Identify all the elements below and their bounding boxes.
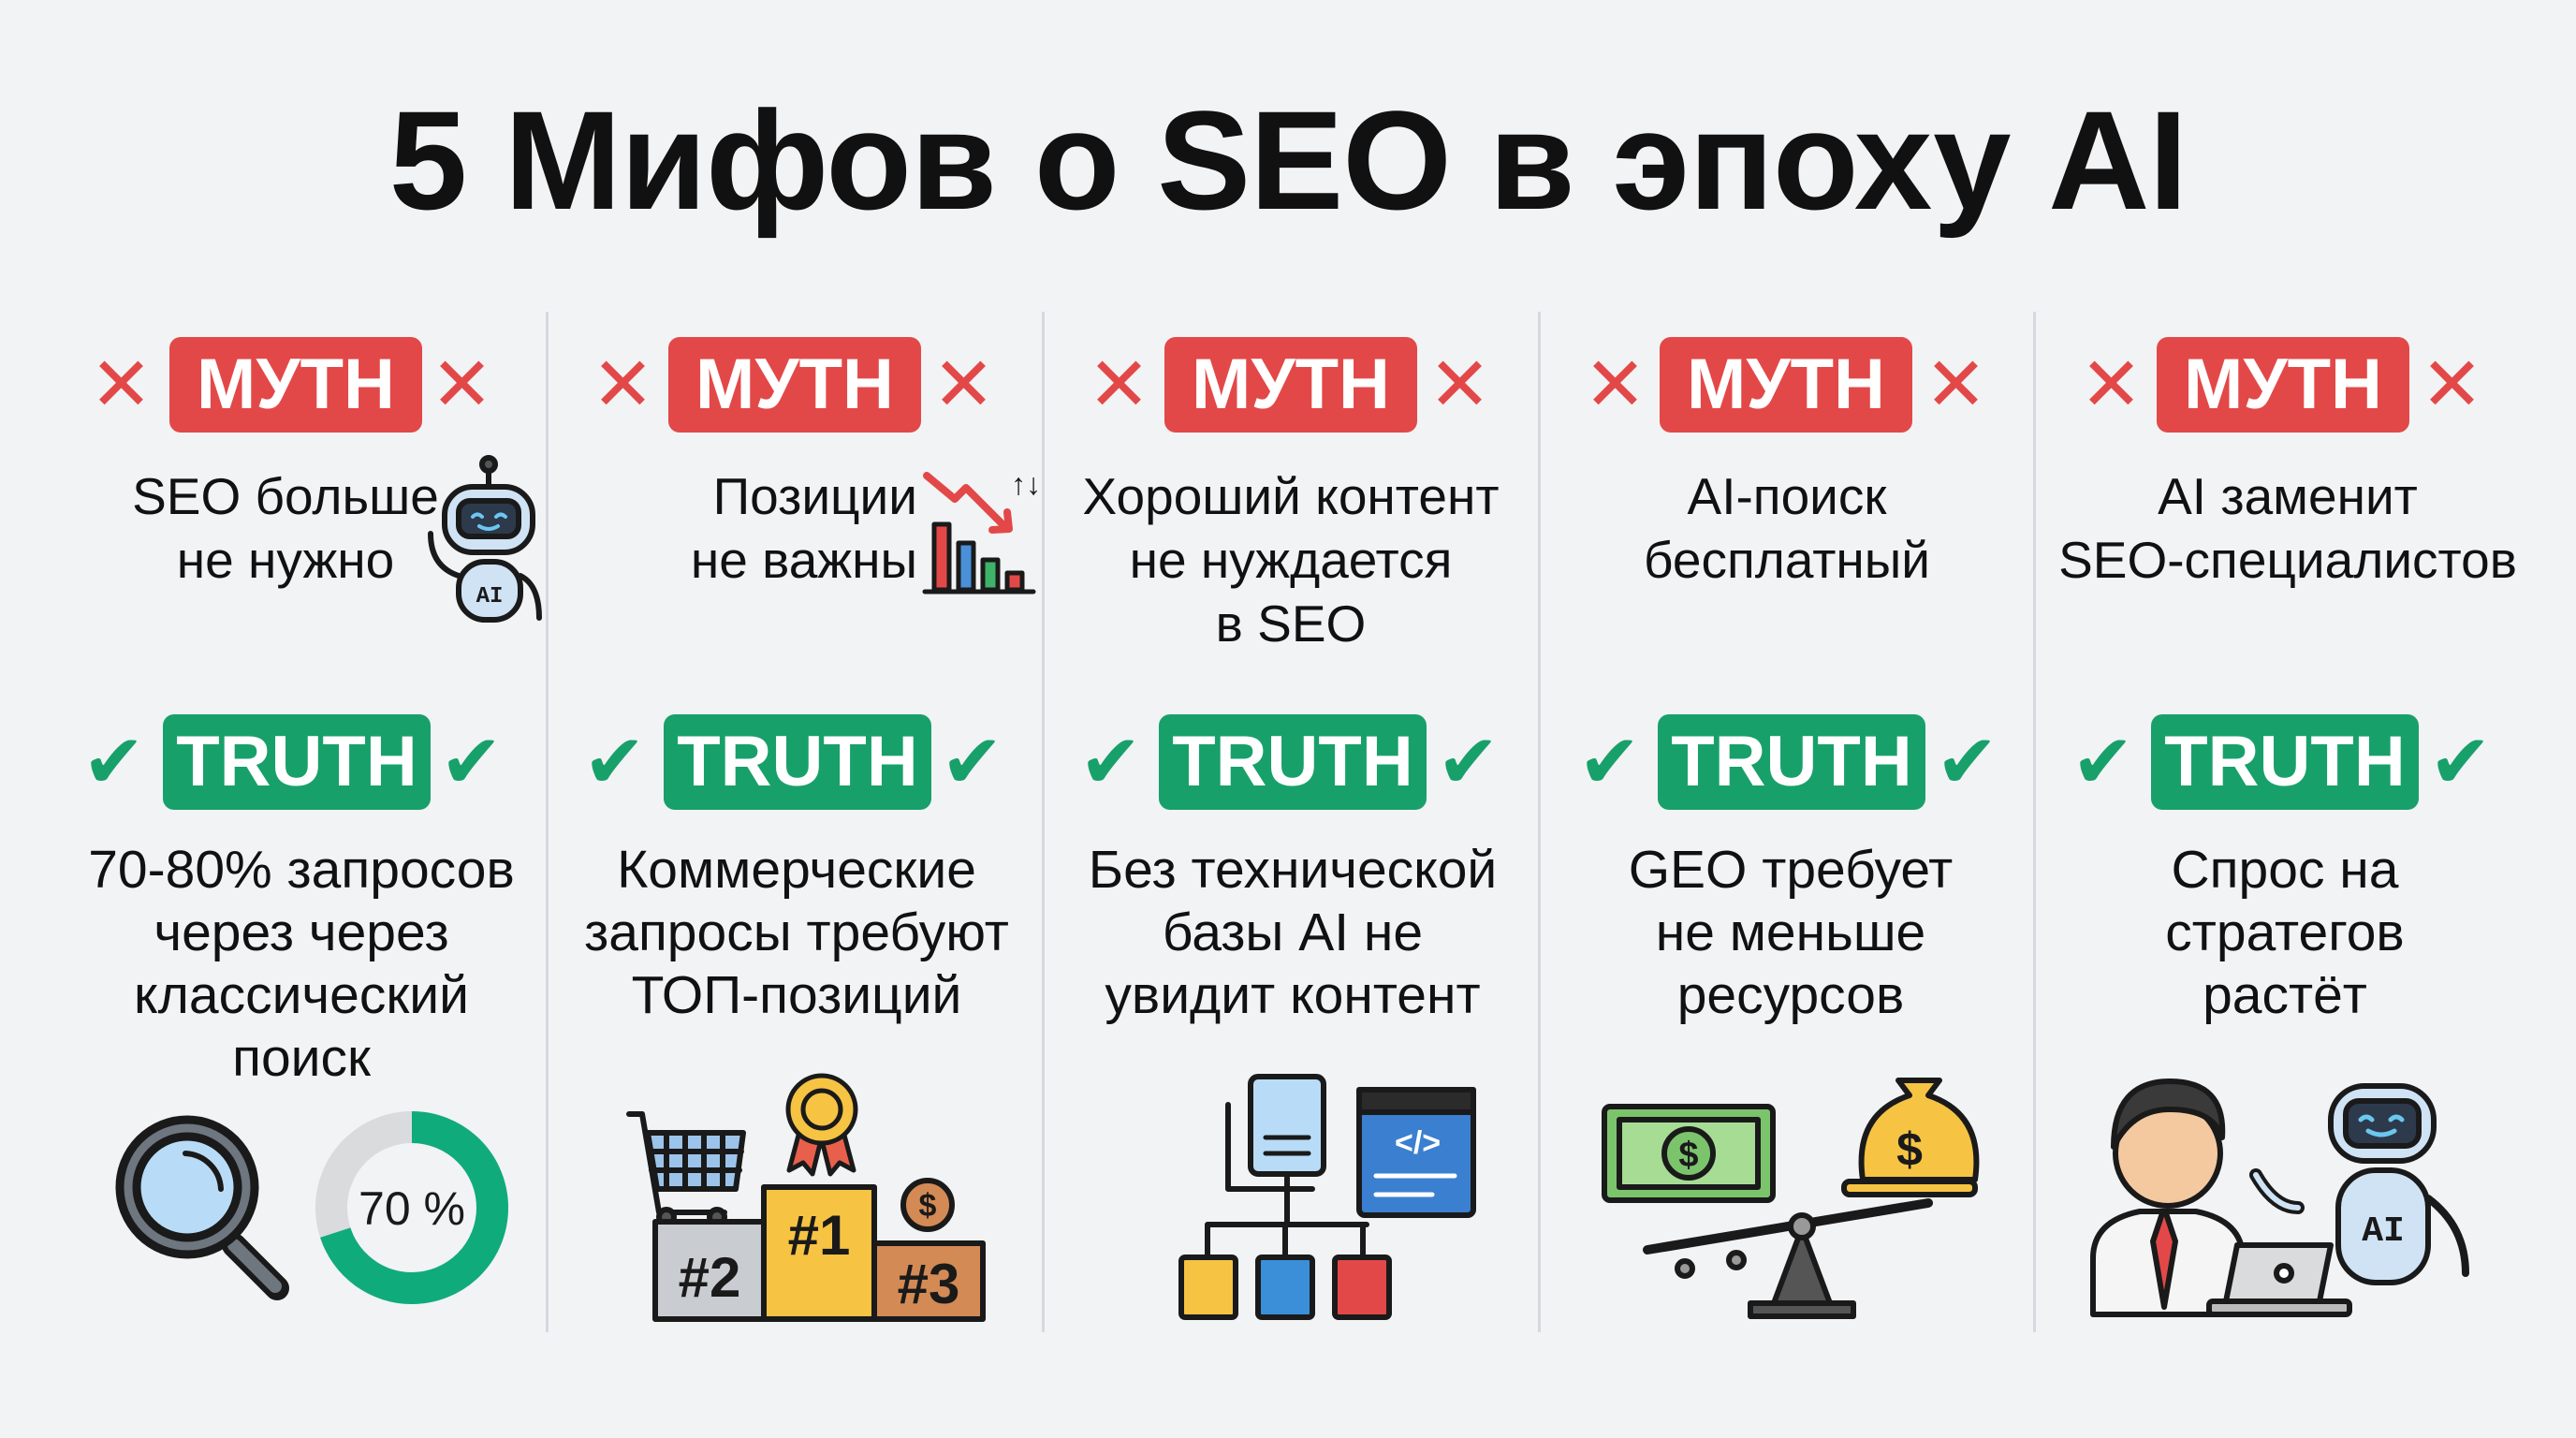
truth text 1: 70-80% запросов — [88, 840, 515, 900]
truth text 4: не меньше — [1656, 902, 1925, 962]
check marks 3: ✔ — [1437, 720, 1500, 803]
myth text 5: SEO-специалистов — [2058, 531, 2517, 589]
check marks 2: ✔ — [941, 720, 1003, 803]
check marks 1: ✔ — [82, 720, 145, 803]
truth badge 4: TRUTH — [1671, 722, 1912, 801]
icon: person, robot, laptop — [2093, 1081, 2466, 1314]
myth badge 1: МУТН — [197, 345, 395, 424]
check marks 2: ✔ — [583, 720, 646, 803]
myth badge 2: МУТН — [695, 345, 894, 424]
myth text 1: SEO больше — [132, 467, 439, 525]
myth badge 3: МУТН — [1192, 345, 1390, 424]
truth text 2: запросы требуют — [584, 902, 1009, 962]
truth badge 5: TRUTH — [2164, 722, 2406, 801]
check marks 2 — [583, 720, 1003, 803]
truth text 1: поиск — [232, 1028, 371, 1088]
myth text 3: не нуждается — [1130, 531, 1452, 589]
myth badge 1 — [169, 337, 422, 433]
truth text 5: растёт — [2203, 965, 2367, 1025]
icon: money and scale: $ — [1678, 1136, 1699, 1175]
icon: magnifier — [120, 1120, 277, 1288]
icon: medal — [788, 1076, 856, 1174]
icon: falling chart — [925, 467, 1041, 592]
myth badge 4 — [1660, 337, 1912, 433]
truth text 1 — [88, 840, 515, 1088]
x marks 2 — [592, 343, 995, 426]
chart: donut 70%: 70 % — [359, 1182, 465, 1235]
myth badge 3 — [1164, 337, 1417, 433]
icon: money and scale: $ — [1896, 1123, 1923, 1176]
icon: cart — [629, 1114, 743, 1225]
myth text 4: AI-поиск — [1688, 467, 1886, 525]
myth badge 5 — [2157, 337, 2409, 433]
icon: robot small — [431, 458, 539, 620]
x marks 4 — [1584, 343, 1987, 426]
check marks 5: ✔ — [2071, 720, 2134, 803]
truth badge 3: TRUTH — [1172, 722, 1413, 801]
myth text 4 — [1644, 467, 1930, 589]
myth text 3: Хороший контент — [1082, 467, 1500, 525]
myth text 4: бесплатный — [1644, 531, 1930, 589]
myth badge 2 — [668, 337, 921, 433]
icon: robot small: AI — [476, 584, 503, 609]
x marks 3: ✕ — [1088, 343, 1150, 426]
icon: document and code tree — [1181, 1077, 1473, 1317]
chart: donut 70% — [331, 1127, 492, 1288]
check marks 5 — [2071, 720, 2492, 803]
truth text 2 — [584, 840, 1009, 1025]
truth badge 1: TRUTH — [176, 722, 417, 801]
x marks 2: ✕ — [932, 343, 995, 426]
check marks 4: ✔ — [1578, 720, 1641, 803]
truth text 1: классический — [134, 965, 469, 1025]
truth text 5 — [2165, 840, 2405, 1025]
truth text 2: Коммерческие — [617, 840, 976, 900]
check marks 3: ✔ — [1079, 720, 1142, 803]
truth text 4 — [1629, 840, 1953, 1025]
x marks 5: ✕ — [2421, 343, 2483, 426]
check marks 4: ✔ — [1936, 720, 1998, 803]
truth text 4: ресурсов — [1677, 965, 1904, 1025]
myth badge 5: МУТН — [2184, 345, 2382, 424]
myth text 5: AI заменит — [2158, 467, 2418, 525]
check marks 5: ✔ — [2429, 720, 2492, 803]
x marks 1 — [90, 343, 493, 426]
myth text 1: не нужно — [177, 531, 394, 589]
check marks 1: ✔ — [440, 720, 503, 803]
myth text 2: не важны — [691, 531, 917, 589]
truth text 3: базы AI не — [1163, 902, 1423, 962]
myth text 2: Позиции — [713, 467, 917, 525]
truth text 4: GEO требует — [1629, 840, 1953, 900]
check marks 1 — [82, 720, 503, 803]
truth text 3: Без технической — [1089, 840, 1497, 900]
truth text 2: ТОП-позиций — [632, 965, 961, 1025]
myth badge 4: МУТН — [1687, 345, 1885, 424]
myth text 3: в SEO — [1216, 594, 1366, 653]
myth text 5 — [2058, 467, 2517, 589]
icon: podium: $ — [919, 1188, 937, 1224]
truth text 1: через через — [154, 902, 449, 962]
x marks 1: ✕ — [90, 343, 153, 426]
truth text 5: стратегов — [2165, 902, 2405, 962]
icon: person, robot, laptop: AI — [2362, 1211, 2405, 1252]
icon: money and scale — [1604, 1080, 1976, 1316]
truth badge 2: TRUTH — [677, 722, 918, 801]
x marks 3: ✕ — [1428, 343, 1491, 426]
x marks 5: ✕ — [2080, 343, 2143, 426]
icon: falling chart: ↑↓ — [1011, 467, 1041, 501]
myth text 2 — [691, 467, 917, 589]
x marks 5 — [2080, 343, 2483, 426]
x marks 4: ✕ — [1925, 343, 1987, 426]
myth text 1 — [132, 467, 439, 589]
truth text 3 — [1089, 840, 1497, 1025]
truth text 5: Спрос на — [2172, 840, 2398, 900]
check marks 3 — [1079, 720, 1500, 803]
title: 5 Мифов о SEO в эпоху AI — [389, 81, 2187, 239]
icon: document and code tree: </> — [1395, 1125, 1441, 1161]
icon: podium: #1 — [788, 1204, 850, 1267]
x marks 2: ✕ — [592, 343, 654, 426]
icon: podium: #3 — [898, 1253, 959, 1315]
truth text 3: увидит контент — [1105, 965, 1481, 1025]
icon: podium — [655, 1181, 983, 1319]
x marks 4: ✕ — [1584, 343, 1647, 426]
myth text 3 — [1082, 467, 1500, 653]
x marks 3 — [1088, 343, 1491, 426]
check marks 4 — [1578, 720, 1998, 803]
icon: podium: #2 — [679, 1246, 740, 1309]
x marks 1: ✕ — [431, 343, 493, 426]
